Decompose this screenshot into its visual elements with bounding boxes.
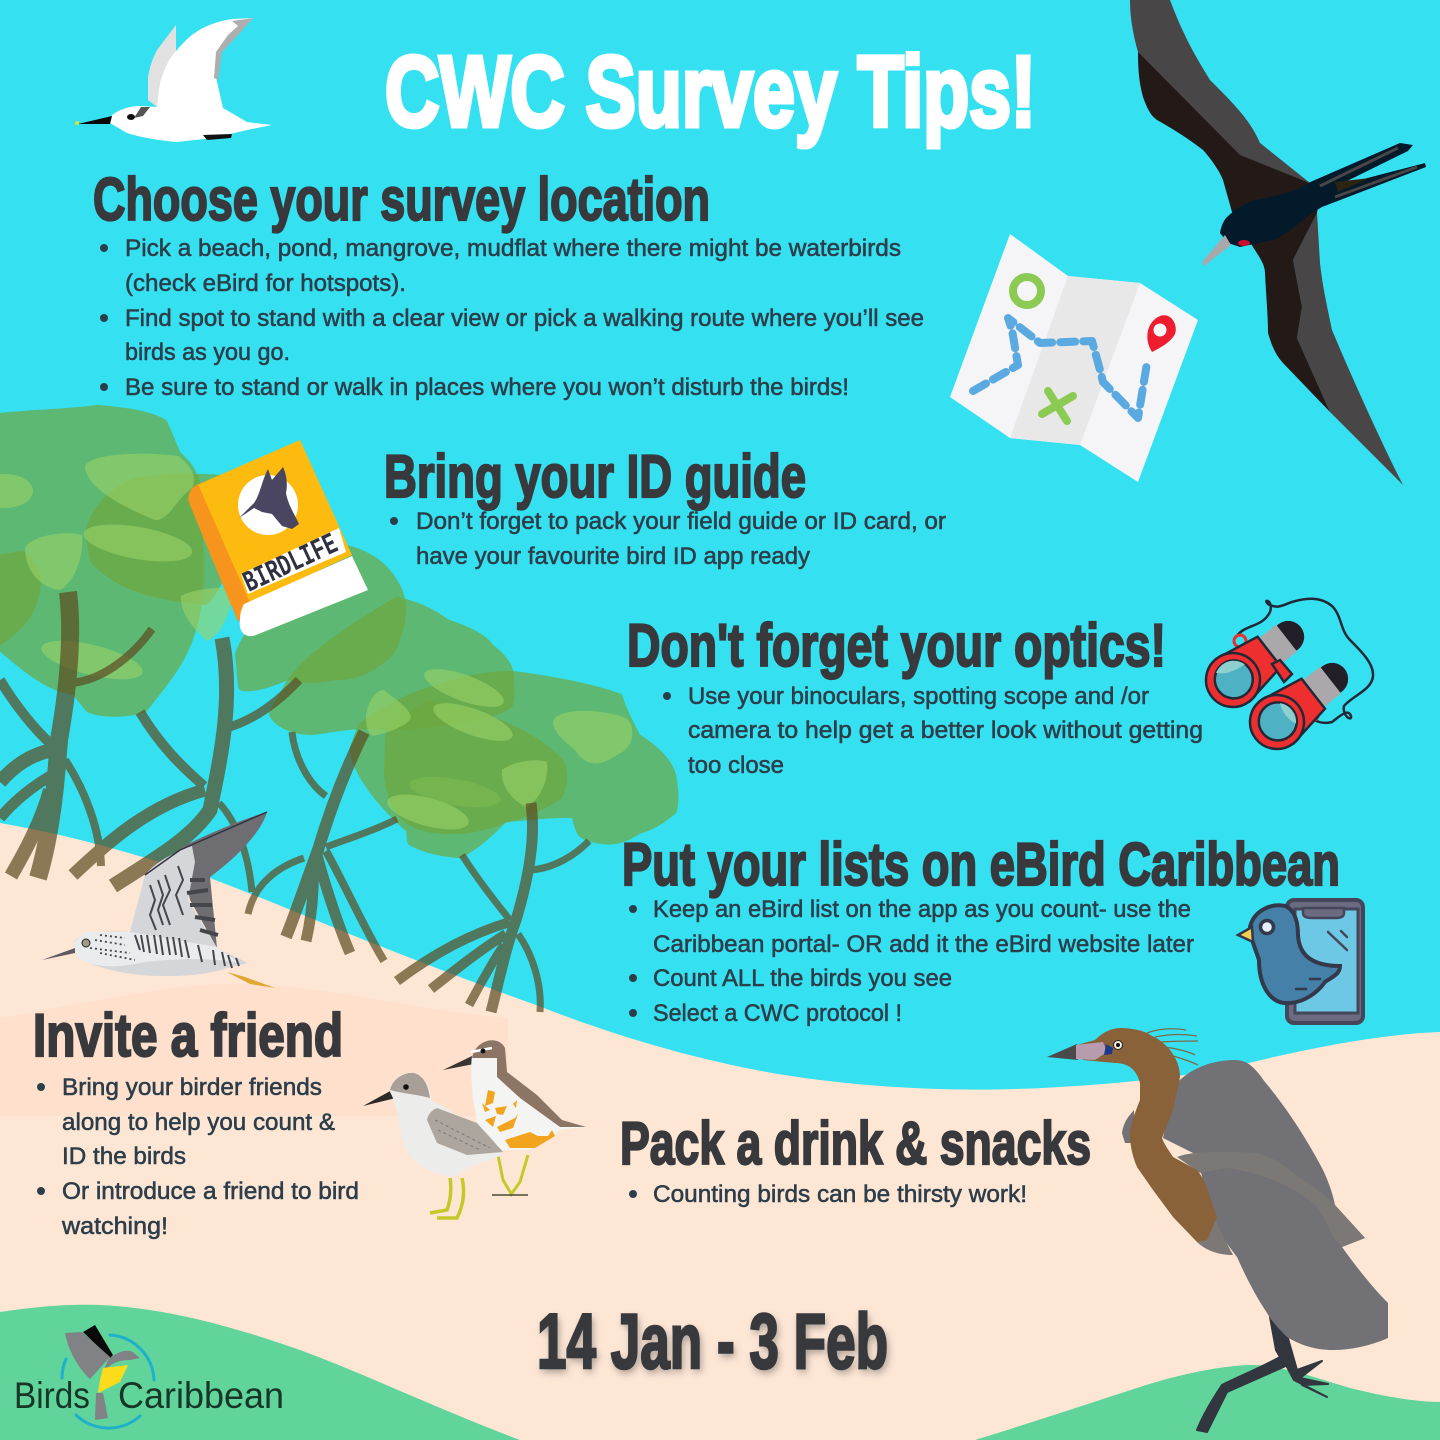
BirdsCaribbean logo (14, 1325, 284, 1428)
sand beach (0, 823, 1440, 1440)
icon: frigatebird (1130, 0, 1426, 485)
text: survey location bullets: Find spot to stand with a clear view or pick a walking route where you’ll see (125, 305, 924, 332)
icon: folded map (950, 234, 1198, 482)
text: optics bullets: Use your binoculars, spotting scope and /or (688, 683, 1149, 710)
text: survey location bullets: Be sure to stand or walk in places where you won’t disturb the birds! (125, 374, 849, 401)
tree crowns (0, 410, 674, 853)
mangrove trees (0, 410, 674, 1012)
BirdsCaribbean logo: Caribbean (118, 1375, 284, 1416)
heading: pack a drink and snacks: Pack a drink & snacks (620, 1110, 1091, 1177)
sand shaded patch (0, 984, 508, 1116)
text: ID guide bullets: have your favourite bird ID app ready (416, 543, 810, 570)
text: snacks bullet: Counting birds can be thirsty work! (653, 1181, 1027, 1208)
tree roots (0, 592, 589, 1012)
text: invite a friend bullets: Bring your birder friends (62, 1074, 322, 1101)
text: invite a friend bullets: Or introduce a friend to bird (62, 1178, 359, 1205)
crown highlights (0, 454, 632, 836)
icon: phone and bird (1238, 900, 1363, 1023)
heading: optics: Don't forget your optics! (627, 612, 1166, 679)
text: eBird bullets (629, 896, 1194, 1027)
heading: invite a friend: Invite a friend (33, 1002, 343, 1069)
text: invite a friend bullets (37, 1074, 359, 1240)
icon: field guide book (188, 440, 368, 636)
heading: choose your survey location: Choose your survey location (93, 166, 710, 233)
text: eBird bullets: Select a CWC protocol ! (653, 1000, 902, 1027)
text: ID guide bullets (390, 508, 946, 570)
icon: white tern (75, 18, 272, 142)
icon: binoculars (1195, 599, 1373, 760)
icon: two shorebirds (363, 1040, 586, 1218)
text: eBird bullets: Caribbean portal- OR add it the eBird website later (653, 931, 1194, 958)
text: eBird bullets: Keep an eBird list on the app as you count- use the (653, 896, 1191, 923)
text: invite a friend bullets: ID the birds (62, 1143, 186, 1170)
text: optics bullets: too close (688, 752, 784, 779)
text: optics bullets: camera to help get a better look without getting (688, 717, 1203, 744)
text: survey location bullets: Pick a beach, pond, mangrove, mudflat where there might be waterbirds (125, 235, 901, 262)
green foreground hills (0, 1305, 1440, 1440)
text: survey location bullets: (check eBird for hotspots). (125, 270, 406, 297)
date line shadow: 14 Jan - 3 Feb (539, 1301, 890, 1389)
text: survey location bullets (100, 235, 924, 401)
text: optics bullets (663, 683, 1203, 779)
text: invite a friend bullets: watching! (61, 1213, 168, 1240)
BirdsCaribbean logo: Birds (14, 1375, 90, 1416)
text: eBird bullets: Count ALL the birds you see (653, 965, 952, 992)
title: CWC Survey Tips! (385, 36, 1036, 148)
date line: 14 Jan - 3 Feb (537, 1297, 888, 1385)
text: invite a friend bullets: along to help you count & (62, 1109, 335, 1136)
icon: reddish egret (1047, 1028, 1388, 1432)
icon: field guide book: BIRDLIFE (239, 528, 344, 601)
icon: sandpiper in flight (42, 812, 275, 988)
text: survey location bullets: birds as you go. (125, 339, 290, 366)
heading: bring your ID guide: Bring your ID guide (384, 443, 806, 510)
text: ID guide bullets: Don’t forget to pack your field guide or ID card, or (416, 508, 946, 535)
